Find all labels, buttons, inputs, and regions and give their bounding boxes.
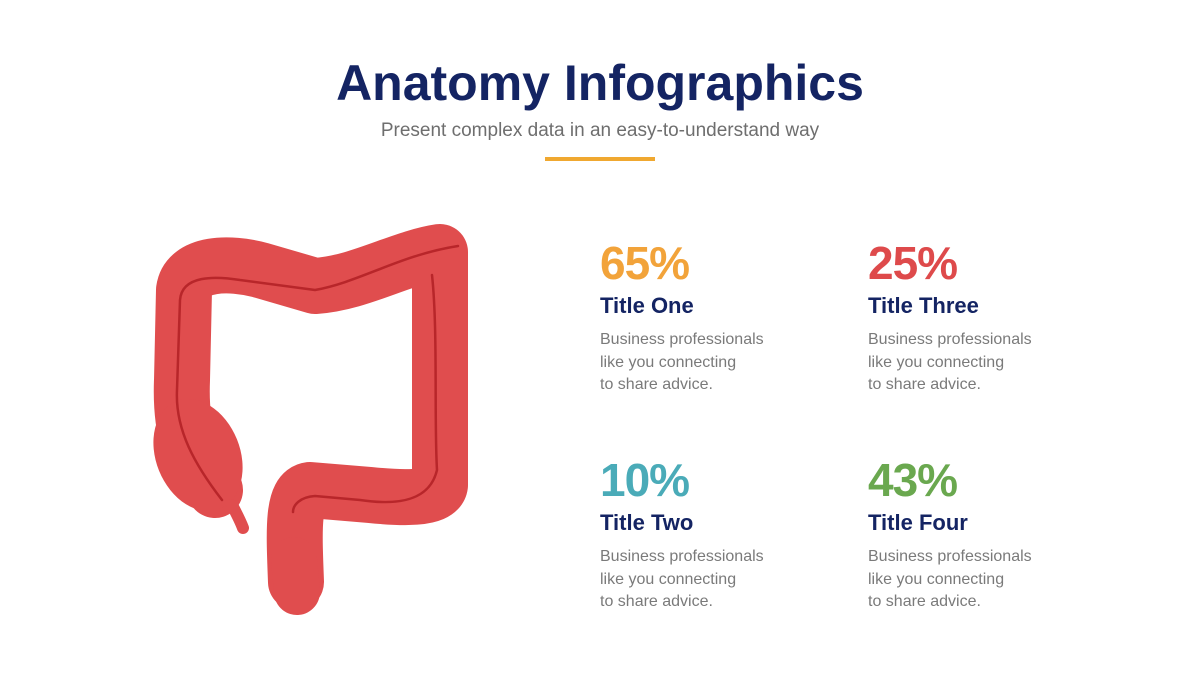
stat: Title Four: like you connecting: [868, 570, 1004, 588]
stat: Title Two: 10%: [600, 454, 689, 506]
stat: Title Three: 25%: [868, 237, 957, 289]
stat: Title One: Title One: [600, 293, 694, 318]
stat: Title Four: Title Four: [868, 510, 968, 535]
stat: Title Three: to share advice.: [868, 376, 981, 393]
title: Anatomy Infographics: [336, 55, 864, 111]
subtitle: Present complex data in an easy-to-understand way: [381, 120, 819, 141]
stat: Title One: [600, 237, 764, 393]
stat: Title Two: like you connecting: [600, 570, 736, 588]
stat: Title Three: Title Three: [868, 293, 979, 318]
illustration: large intestine: [153, 224, 468, 615]
stat: Title Four: Business professionals: [868, 548, 1032, 565]
accent line: [545, 157, 655, 161]
stat: Title One: Business professionals: [600, 331, 764, 348]
stat: Title Three: Business professionals: [868, 331, 1032, 348]
stat: Title Two: [600, 454, 764, 610]
stat: Title Two: Title Two: [600, 510, 693, 535]
stat: Title Three: [868, 237, 1032, 393]
stat: Title Two: to share advice.: [600, 593, 713, 610]
stat: Title Four: [868, 454, 1032, 610]
stat: Title One: to share advice.: [600, 376, 713, 393]
stat: Title Two: Business professionals: [600, 548, 764, 565]
stat: Title Four: to share advice.: [868, 593, 981, 610]
stat: Title Three: like you connecting: [868, 354, 1004, 370]
stat: Title One: like you connecting: [600, 354, 736, 370]
stat: Title One: 65%: [600, 237, 689, 289]
stat: Title Four: 43%: [868, 454, 957, 506]
